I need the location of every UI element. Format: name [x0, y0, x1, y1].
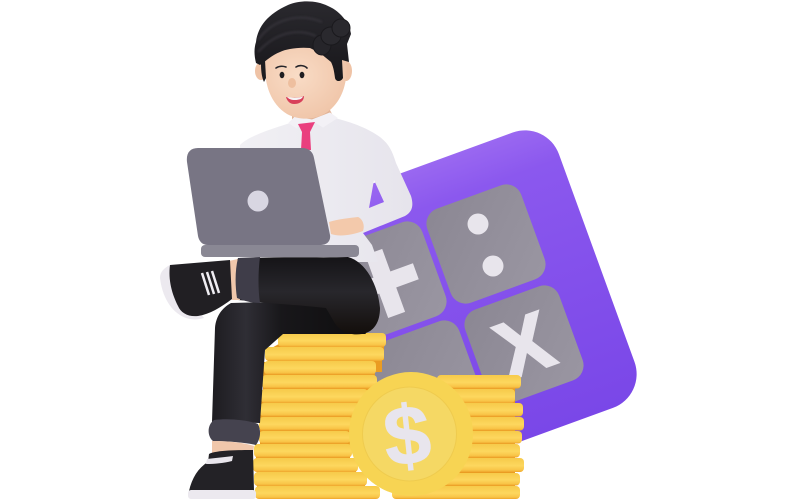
rear leg: [212, 300, 366, 423]
shirt torso and arm: [240, 118, 412, 262]
big dollar coin: [349, 372, 473, 496]
button: multiply: [460, 281, 588, 409]
crossed thigh: [237, 257, 380, 334]
left coin stack: [253, 333, 386, 499]
nose: [288, 78, 296, 88]
eyebrows: [276, 66, 307, 68]
eyes: [280, 72, 304, 78]
mouth: [286, 96, 304, 104]
right coin stack: [392, 375, 524, 499]
neck: [292, 110, 334, 123]
laptop logo: [248, 190, 268, 212]
button: minus: [360, 316, 488, 444]
rear shoe: [188, 450, 256, 499]
face: [265, 47, 346, 119]
hair: [254, 1, 351, 81]
collar: [289, 113, 337, 128]
calculator body: [271, 120, 647, 496]
left sideburn: [261, 60, 266, 82]
calculator: [271, 120, 647, 496]
left ear: [255, 62, 267, 80]
upper shoe: [160, 260, 232, 320]
right ear: [340, 61, 352, 81]
laptop: [187, 148, 359, 257]
hand: [329, 217, 364, 235]
upper trouser cuff: [236, 257, 260, 303]
dollar sign: $: [379, 387, 435, 484]
man: [160, 1, 412, 499]
hair strands: [258, 18, 350, 55]
laptop base: [201, 245, 359, 257]
button: multiply: X: [484, 295, 564, 396]
upper ankle: [224, 259, 240, 300]
tie: [298, 122, 315, 150]
rear trouser cuff: [209, 419, 260, 445]
rear ankle: [212, 441, 254, 453]
button: plus: [323, 217, 451, 345]
laptop screen: [187, 148, 330, 245]
button: divide: [422, 180, 550, 308]
